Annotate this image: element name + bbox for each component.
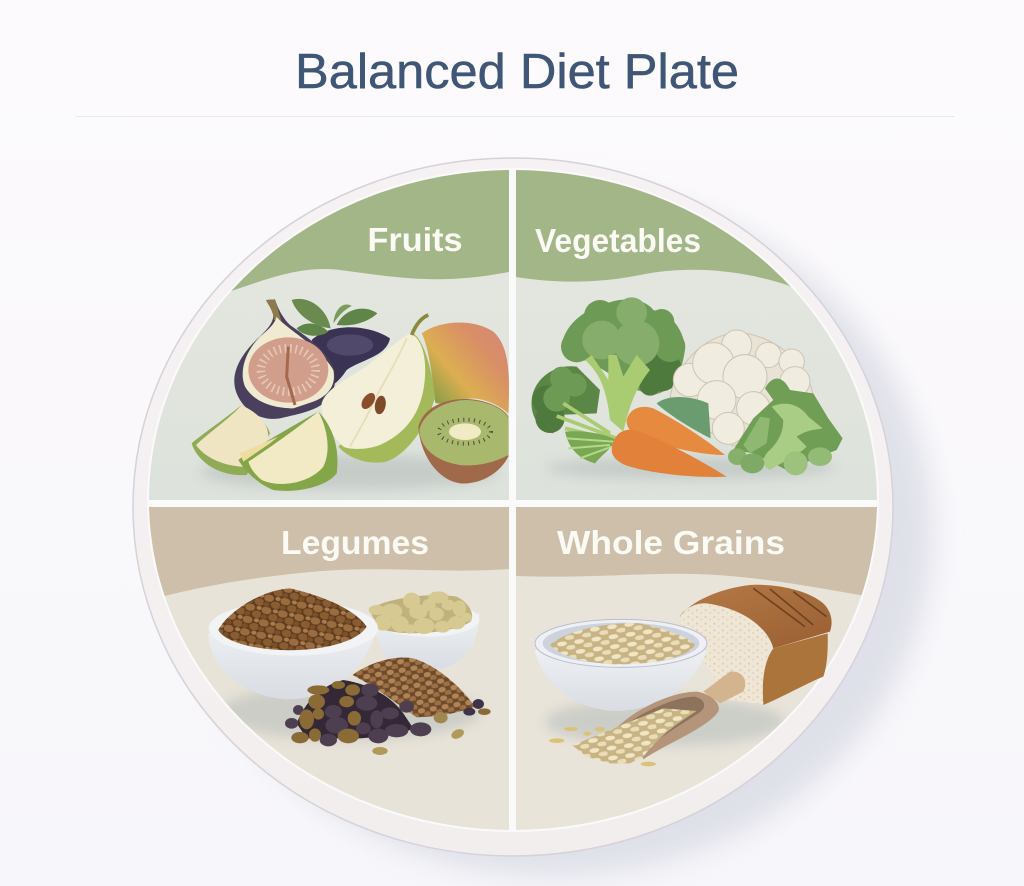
- grains band: [516, 507, 877, 598]
- grains in scoop and spill: [573, 708, 697, 763]
- apple slices: [192, 405, 337, 491]
- wooden scoop: [613, 671, 745, 759]
- plate: [133, 158, 933, 877]
- panel: legumes: [149, 507, 509, 830]
- mango: [422, 322, 509, 413]
- bread loaf: [680, 585, 832, 705]
- plate dividers: [148, 168, 878, 832]
- icon: fruits group: [192, 299, 509, 491]
- bowl of oats: [535, 619, 707, 711]
- panel: fruits: [149, 170, 509, 500]
- reddish lentil pile: [353, 657, 475, 717]
- green vegetables: [728, 378, 843, 475]
- title: Balanced Diet Plate: [295, 45, 739, 99]
- front bowl of lentils: [208, 588, 378, 699]
- panel: whole grains: [516, 507, 877, 830]
- food shadows: [200, 454, 835, 746]
- back bowl of chickpeas: [369, 591, 479, 669]
- kiwi: [418, 399, 508, 483]
- plum and leaves: [292, 299, 390, 385]
- heading: fruits: Fruits: [368, 221, 462, 258]
- heading: vegetables: Vegetables: [535, 222, 701, 259]
- plate shadow: [177, 187, 933, 877]
- heading: whole grains: Whole Grains: [557, 524, 785, 561]
- vegetables band: [516, 170, 792, 288]
- leaf behind carrots: [657, 397, 711, 438]
- scattered grains: [549, 727, 656, 766]
- icon: legumes group: [208, 588, 491, 755]
- fruits band: [231, 170, 509, 291]
- icon: whole grains group: [535, 585, 832, 766]
- scattered beans: [372, 699, 491, 755]
- pear half: [321, 315, 435, 463]
- panel: vegetables: [516, 170, 877, 500]
- plate rim: [133, 158, 893, 856]
- legumes band: [149, 507, 509, 600]
- carrots: [612, 407, 727, 477]
- headings: [281, 221, 785, 561]
- heading: legumes: Legumes: [281, 524, 429, 561]
- broccoli: [531, 297, 685, 463]
- cauliflower: [670, 330, 813, 446]
- fig: [234, 299, 335, 419]
- black bean pile: [285, 680, 431, 746]
- icon: vegetables group: [531, 297, 843, 477]
